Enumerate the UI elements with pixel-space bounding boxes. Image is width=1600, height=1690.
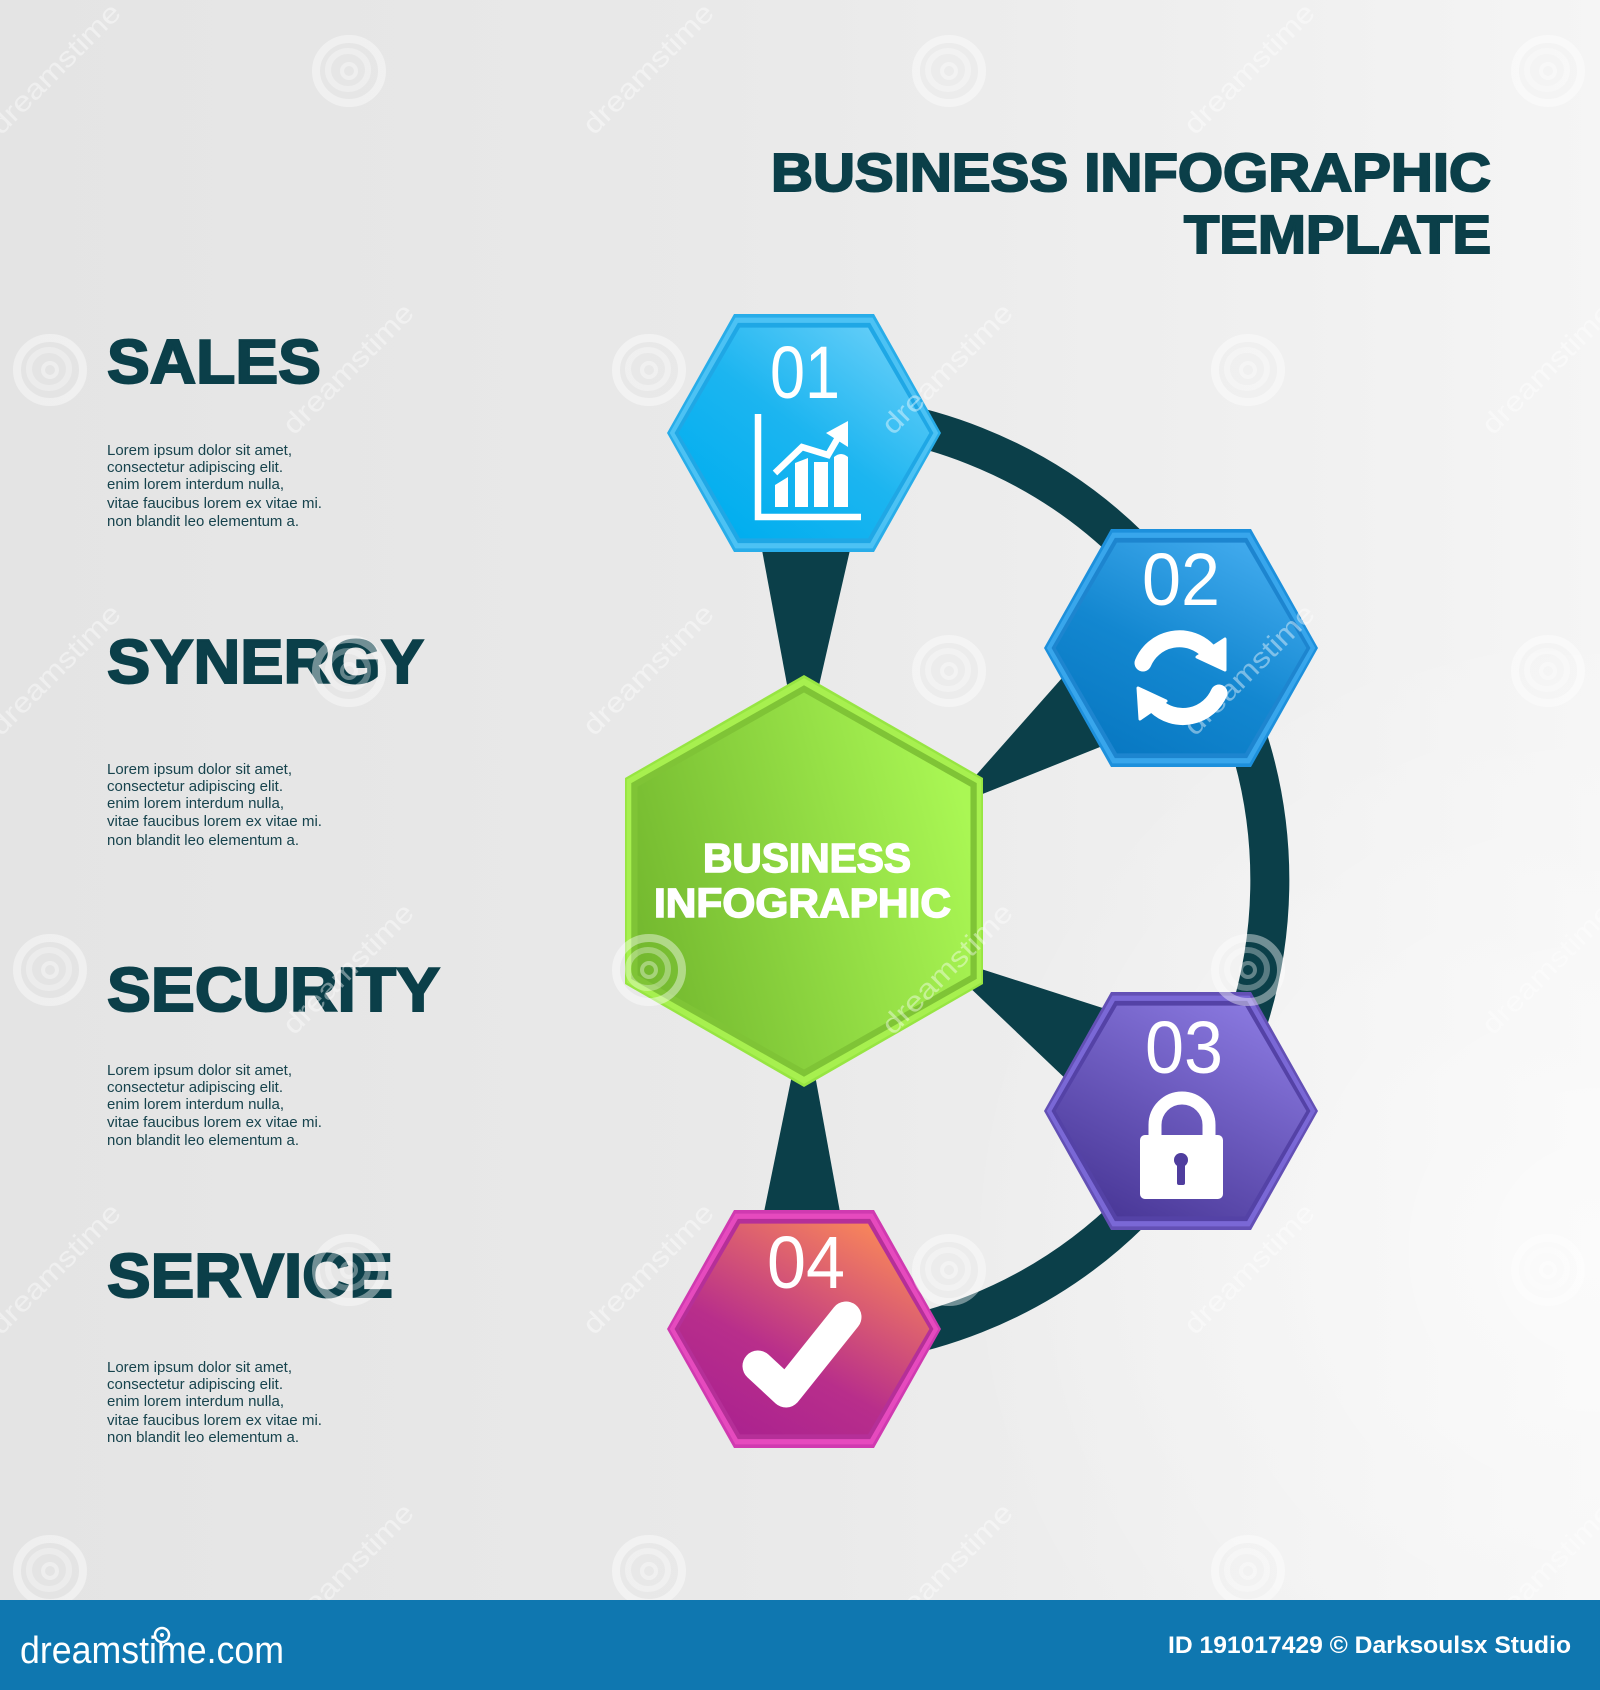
watermark text: dreamstime — [875, 897, 1019, 1040]
watermark text: dreamstime — [875, 297, 1019, 440]
text block: synergy: consectetur adipiscing elit. — [107, 778, 283, 795]
title — [771, 143, 1491, 265]
text block: security: Lorem ipsum dolor sit amet, — [107, 1062, 292, 1079]
connector: center to 01 — [762, 550, 850, 690]
text block: service: Lorem ipsum dolor sit amet, — [107, 1359, 292, 1376]
text block: security: enim lorem interdum nulla, — [107, 1096, 284, 1113]
text block: service: enim lorem interdum nulla, — [107, 1393, 284, 1410]
heading: synergy: SYNERGY — [107, 628, 424, 697]
center label: INFOGRAPHIC — [654, 880, 951, 926]
panel: synergy text — [107, 628, 424, 849]
text block: security: consectetur adipiscing elit. — [107, 1079, 283, 1096]
title: TEMPLATE — [1184, 205, 1491, 265]
text block: synergy: Lorem ipsum dolor sit amet, — [107, 761, 292, 778]
watermark text: dreamstime — [1475, 1497, 1600, 1640]
watermark text: dreamstime — [1475, 297, 1600, 440]
panel: service text — [107, 1242, 393, 1446]
watermark text: dreamstime — [576, 0, 720, 140]
text block: synergy: non blandit leo elementum a. — [107, 832, 299, 849]
number 03: 03 — [1145, 1006, 1223, 1089]
center hexagon: business infographic — [625, 675, 983, 1087]
text block: sales: vitae faucibus lorem ex vitae mi. — [107, 495, 322, 512]
footer credit: ID 191017429 © Darksoulsx Studio — [1168, 1632, 1571, 1659]
icon: rising bar chart — [758, 414, 861, 517]
text block: sales: enim lorem interdum nulla, — [107, 476, 284, 493]
footer banner — [0, 1600, 1600, 1690]
panel: security text — [107, 956, 440, 1149]
watermark text: dreamstime — [576, 1197, 720, 1340]
connector: center to 03 — [965, 967, 1112, 1083]
watermark text: dreamstime — [1177, 598, 1321, 741]
text block: sales: consectetur adipiscing elit. — [107, 459, 283, 476]
hexagon 03: lock — [1044, 992, 1318, 1230]
number 01: 01 — [770, 331, 840, 414]
text block: synergy — [107, 761, 322, 849]
text block: security: non blandit leo elementum a. — [107, 1132, 299, 1149]
text block: service — [107, 1359, 322, 1446]
text block: synergy: enim lorem interdum nulla, — [107, 795, 284, 812]
watermark text: dreamstime — [276, 897, 420, 1040]
title: BUSINESS INFOGRAPHIC — [771, 143, 1491, 203]
hexagon 02: refresh — [1044, 529, 1318, 767]
text block: security — [107, 1062, 322, 1149]
number 02: 02 — [1142, 538, 1220, 621]
watermark text: dreamstime — [576, 598, 720, 741]
heading: sales: SALES — [107, 328, 321, 397]
watermark text: dreamstime — [1177, 0, 1321, 140]
text block: sales — [107, 442, 322, 530]
text block: security: vitae faucibus lorem ex vitae mi. — [107, 1114, 322, 1131]
hexagon 04: check mark — [667, 1210, 941, 1448]
watermark text: dreamstime — [276, 297, 420, 440]
text block: sales: Lorem ipsum dolor sit amet, — [107, 442, 292, 459]
icon: refresh arrows — [1138, 639, 1225, 719]
heading: service: SERVICE — [107, 1242, 393, 1311]
panel: sales text — [107, 328, 322, 530]
connector: center to 04 — [764, 1075, 840, 1212]
watermark text: dreamstime — [276, 1497, 420, 1640]
text block: synergy: vitae faucibus lorem ex vitae mi. — [107, 813, 322, 830]
connector: center to 02 — [970, 669, 1110, 797]
center label — [654, 835, 951, 926]
center label: BUSINESS — [703, 835, 911, 881]
text block: service: consectetur adipiscing elit. — [107, 1376, 283, 1393]
watermark text: dreamstime — [875, 1497, 1019, 1640]
ring arc connecting the hexagons — [803, 413, 1270, 1347]
heading: security: SECURITY — [107, 956, 440, 1025]
hexagon 01: chart — [667, 314, 941, 552]
footer logo: dreamstime.com — [20, 1630, 284, 1672]
text block: sales: non blandit leo elementum a. — [107, 513, 299, 530]
icon: padlock — [1140, 1098, 1223, 1199]
number 04: 04 — [767, 1221, 845, 1304]
text block: service: vitae faucibus lorem ex vitae mi. — [107, 1412, 322, 1429]
icon: check mark — [758, 1317, 846, 1392]
watermark text: dreamstime — [1475, 897, 1600, 1040]
watermark text: dreamstime — [1177, 1197, 1321, 1340]
text block: service: non blandit leo elementum a. — [107, 1429, 299, 1446]
